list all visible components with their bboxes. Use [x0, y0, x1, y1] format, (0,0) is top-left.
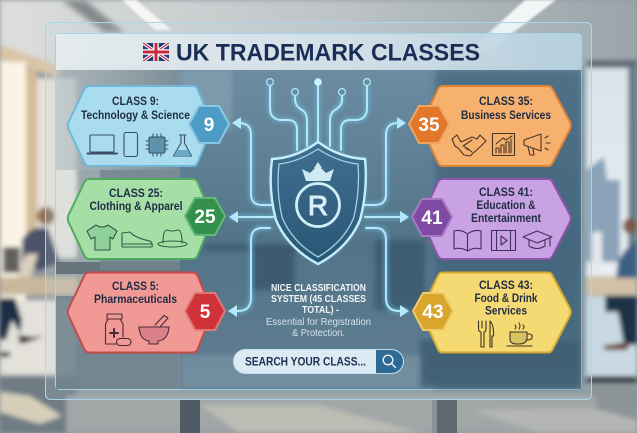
arrow: to class 35 [364, 117, 406, 205]
heading: class 9: Technology & Science [81, 109, 190, 122]
panel: class 9 [68, 86, 229, 166]
scene left figures [3, 247, 20, 273]
arrow: to class 41 [365, 211, 409, 223]
heading: class 35: CLASS 35: [479, 95, 533, 108]
arrow: to class 9 [232, 117, 272, 205]
badge: 5 [185, 293, 225, 330]
badge: 41: 41 [421, 208, 443, 229]
panel: class 41 [412, 179, 571, 259]
heading: class 5: CLASS 5: [112, 280, 159, 293]
badge: 41 [412, 199, 452, 236]
panel: class 35 [409, 86, 571, 166]
heading: class 43: Services [485, 304, 527, 318]
badge: 43: 43 [422, 302, 444, 323]
heading: class 41 [471, 186, 541, 225]
circuit connectors [228, 78, 409, 317]
heading: class 41: Entertainment [471, 212, 541, 225]
heading: class 35 [461, 95, 551, 122]
heading: class 5 [94, 280, 177, 306]
icons: pharmaceuticals [106, 314, 169, 346]
text block: nice classification note: Essential for Registration [266, 317, 371, 328]
badge: 25 [185, 198, 225, 235]
heading: class 9: CLASS 9: [112, 95, 159, 108]
heading: class 43: CLASS 43: [479, 279, 533, 292]
text block: nice classification note: SYSTEM (45 CLASSES [271, 294, 366, 305]
heading: class 41: CLASS 41: [479, 186, 533, 199]
data lines from nodes [267, 78, 370, 150]
badge: 9: 9 [204, 115, 214, 136]
panel: class 43 [413, 272, 571, 352]
icon: UK flag [143, 43, 169, 61]
scene right [586, 60, 637, 70]
search label: SEARCH YOUR CLASS... [245, 354, 366, 368]
heading: class 9 [81, 95, 190, 122]
icons: clothing [87, 225, 187, 250]
icon: crown [302, 162, 334, 181]
heading: class 43 [474, 279, 538, 318]
icon: registered symbol: R [308, 190, 328, 221]
title band [56, 34, 581, 70]
text block: nice classification note: & Protection. [292, 328, 345, 339]
heading: class 25 [90, 187, 182, 213]
icons: education [454, 230, 552, 251]
search bar [234, 350, 404, 374]
heading: class 43: Food & Drink [474, 292, 538, 305]
text block: nice classification note [266, 283, 371, 339]
arrow: to class 25 [229, 211, 273, 223]
badge: 43 [413, 293, 453, 330]
text block: nice classification note: NICE CLASSIFICATION [271, 283, 366, 294]
icon: magnifier [383, 355, 396, 368]
arrow: to class 43 [366, 228, 409, 317]
icons: food and drink [478, 321, 532, 347]
text block: nice classification note: TOTAL) - [302, 305, 339, 316]
glass panel [46, 22, 592, 400]
badge: 35 [409, 106, 449, 143]
badge: 5: 5 [200, 302, 211, 323]
badge: 25: 25 [194, 207, 216, 228]
arrow: to class 5 [228, 228, 270, 317]
icons: business [452, 134, 550, 156]
badge: 35: 35 [418, 115, 440, 136]
heading: class 5: Pharmaceuticals [94, 293, 177, 306]
heading: class 41: Education & [476, 199, 536, 212]
panel: class 5 [68, 272, 225, 352]
heading: class 25: Clothing & Apparel [90, 200, 182, 213]
badge: 9 [189, 106, 229, 143]
heading: class 25: CLASS 25: [109, 187, 163, 200]
panel: class 25 [68, 179, 225, 259]
heading: class 35: Business Services [461, 109, 551, 122]
icons: technology [88, 132, 192, 156]
title: UK TRADEMARK CLASSES [176, 40, 480, 66]
shield with registered mark [271, 142, 366, 264]
